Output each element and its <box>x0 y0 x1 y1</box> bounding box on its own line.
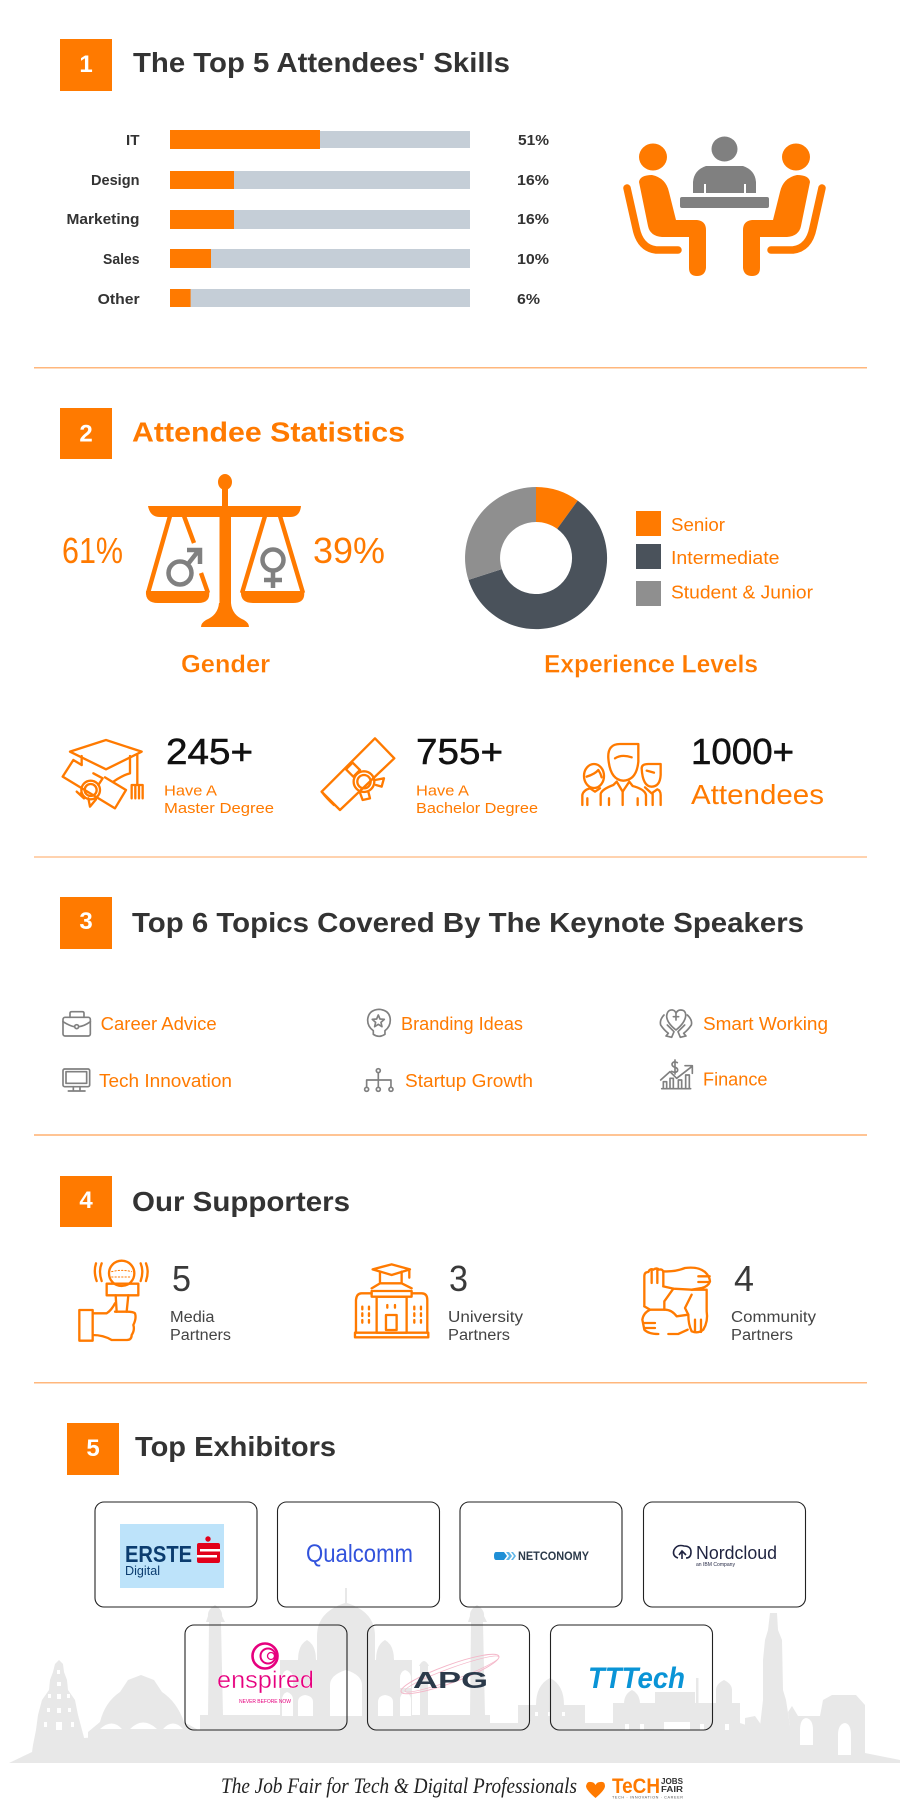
stat: bachelor degree: 755+ <box>416 731 503 772</box>
icon: diploma scroll <box>322 738 394 810</box>
bar: IT <box>126 130 549 149</box>
logo: Tech Jobs Fair: TeCH <box>612 1775 660 1798</box>
topic: career advice <box>63 1012 217 1036</box>
section number 3: 3 <box>79 908 93 935</box>
section 5: top exhibitors <box>67 1423 806 1730</box>
card: Netconomy <box>460 1502 622 1607</box>
bar: Marketing: Marketing <box>66 211 140 228</box>
card: Enspired <box>185 1625 347 1730</box>
card: Nordcloud <box>644 1502 806 1607</box>
icon: graduation cap and scroll <box>63 740 143 808</box>
bar: Sales: Sales <box>103 251 140 268</box>
section 1: top skills <box>60 39 822 308</box>
icon: three people at a table <box>627 136 822 276</box>
card: TTTech <box>550 1625 712 1730</box>
icon: heart <box>586 1782 605 1798</box>
icon: gender scale <box>146 474 304 627</box>
legend: experience levels: Senior <box>671 515 725 535</box>
logo: Tech Jobs Fair: FAIR <box>661 1785 683 1794</box>
logo: Tech Jobs Fair <box>612 1775 684 1800</box>
section number 3 <box>60 897 112 949</box>
stat: media partners <box>170 1258 231 1344</box>
icon: four linked hands <box>642 1268 710 1334</box>
section 3: keynote topics <box>60 897 828 1091</box>
stat: media partners: Partners <box>170 1327 231 1344</box>
stat: master degree <box>164 731 274 817</box>
gender percentage: female: 39% <box>313 530 385 571</box>
section number 5: 5 <box>86 1435 100 1462</box>
icon: microphone in hand <box>79 1261 148 1341</box>
bar: Other <box>98 289 540 308</box>
topic: tech innovation <box>63 1069 232 1091</box>
bar: Sales: 10% <box>517 251 549 268</box>
stat: bachelor degree <box>416 731 538 817</box>
card: Qualcomm: Qualcomm <box>306 1540 413 1568</box>
stat: community partners: Partners <box>731 1327 793 1344</box>
card: Nordcloud: Nordcloud <box>696 1543 777 1563</box>
card: Erste Digital: Digital <box>125 1563 160 1578</box>
card: Enspired: enspired <box>217 1667 314 1694</box>
bar: Other: 6% <box>517 291 540 308</box>
topic: finance <box>661 1060 768 1090</box>
topic: branding ideas <box>368 1009 523 1036</box>
logo: Tech Jobs Fair: JOBS <box>661 1777 684 1786</box>
label: experience levels: Experience Levels <box>544 650 758 678</box>
bar: Design: 16% <box>517 172 549 189</box>
topic: branding ideas: Branding Ideas <box>401 1014 523 1034</box>
section 4: supporters <box>60 1176 816 1344</box>
stat: media partners: 5 <box>172 1258 191 1299</box>
bar: Marketing: 16% <box>517 211 549 228</box>
donut chart: experience levels <box>465 487 607 629</box>
stat: master degree: Master Degree <box>164 800 274 817</box>
card: Nordcloud: an IBM Company <box>696 1562 735 1568</box>
stat: total attendees: Attendees <box>691 779 824 810</box>
card: APG: APG <box>413 1667 488 1693</box>
stat: total attendees <box>691 731 824 810</box>
stat: university partners: University <box>448 1309 523 1326</box>
bar: Design: Design <box>91 172 140 189</box>
section number 2: 2 <box>79 420 93 448</box>
section number 2 <box>60 408 112 459</box>
card: Netconomy: NETCONOMY <box>518 1549 589 1563</box>
legend: experience levels: Student & Junior <box>671 582 813 602</box>
stat: total attendees: 1000+ <box>691 731 794 772</box>
tagline: The Job Fair for Tech & Digital Professionals <box>221 1773 577 1798</box>
topic: startup growth: Startup Growth <box>405 1071 533 1091</box>
topic: tech innovation: Tech Innovation <box>99 1071 232 1091</box>
section number 5 <box>67 1423 119 1475</box>
card: Erste Digital: ERSTE <box>125 1541 192 1567</box>
bar: Sales <box>103 249 549 268</box>
bar: Marketing <box>66 210 549 229</box>
topic: startup growth <box>365 1069 533 1091</box>
section 2: attendee statistics <box>60 408 824 817</box>
topic: finance: Finance <box>703 1070 768 1090</box>
skyline background <box>9 1588 900 1763</box>
icon: group of attendees <box>582 744 661 805</box>
card: Erste Digital <box>95 1502 257 1607</box>
heading: exhibitors: Top Exhibitors <box>135 1431 336 1462</box>
stat: bachelor degree: Bachelor Degree <box>416 800 538 817</box>
section number 1: 1 <box>79 51 93 78</box>
section number 4 <box>60 1176 112 1227</box>
stat: community partners <box>731 1258 816 1344</box>
stat: community partners: 4 <box>734 1258 754 1299</box>
label: gender: Gender <box>181 650 270 678</box>
topic: smart working: Smart Working <box>703 1014 828 1034</box>
card: APG <box>368 1625 530 1730</box>
stat: university partners: Partners <box>448 1327 510 1344</box>
topic: career advice: Career Advice <box>101 1014 217 1034</box>
stat: university partners: 3 <box>449 1258 468 1299</box>
card: TTTech: TTTech <box>588 1662 685 1695</box>
heading: topics: Top 6 Topics Covered By The Keynote Speakers <box>132 907 804 938</box>
heading: skills: The Top 5 Attendees' Skills <box>133 47 510 78</box>
heading: statistics: Attendee Statistics <box>132 416 405 448</box>
skyline windows and arches <box>44 1670 851 1755</box>
bar: IT: IT <box>126 132 140 149</box>
stat: master degree: 245+ <box>166 731 253 772</box>
bar: IT: 51% <box>518 132 549 149</box>
footer <box>221 1773 684 1800</box>
legend: experience levels <box>636 511 813 606</box>
gender percentage: male: 61% <box>62 530 123 571</box>
section number 1 <box>60 39 112 91</box>
bar: Design <box>91 171 549 189</box>
bar chart: skills <box>66 130 549 308</box>
card: Enspired: NEVER BEFORE NOW <box>239 1699 291 1705</box>
logo: Tech Jobs Fair: TECH · INNOVATION · CAREER <box>612 1796 683 1800</box>
stat: media partners: Media <box>170 1309 215 1326</box>
stat: university partners <box>448 1258 523 1344</box>
topic: smart working <box>660 1010 828 1037</box>
stat: master degree: Have A <box>164 782 217 800</box>
legend: experience levels: Intermediate <box>671 548 780 568</box>
card: Qualcomm <box>278 1502 440 1607</box>
stat: bachelor degree: Have A <box>416 782 469 800</box>
heading: supporters: Our Supporters <box>132 1186 350 1217</box>
section number 4: 4 <box>79 1187 93 1214</box>
bar: Other: Other <box>98 291 140 308</box>
stat: community partners: Community <box>731 1309 816 1326</box>
icon: university building <box>355 1264 428 1337</box>
